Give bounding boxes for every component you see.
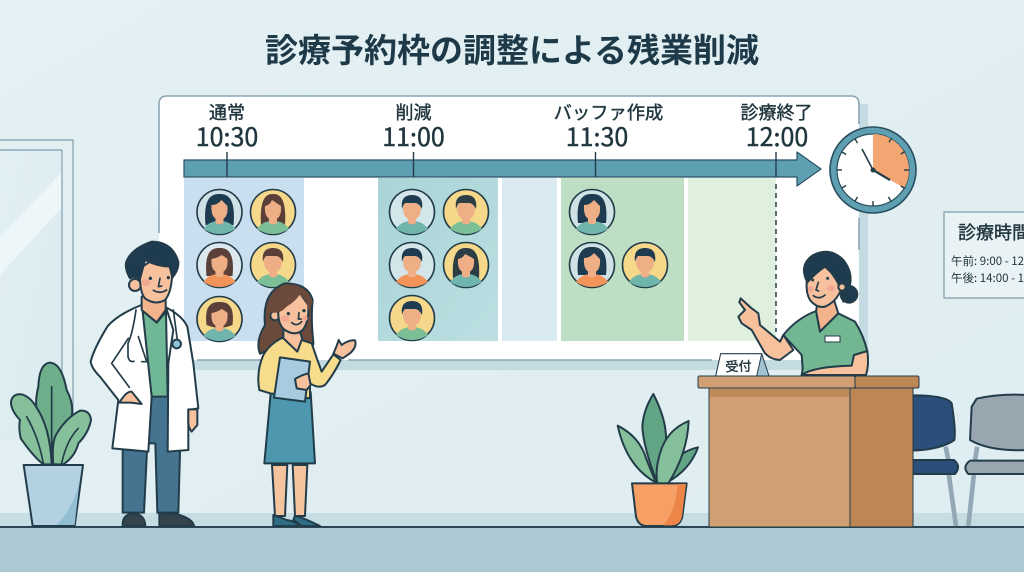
plant: right xyxy=(618,394,698,526)
title: 診療予約枠の調整による残業削減 xyxy=(265,24,759,72)
avatars: 11:30 column xyxy=(570,190,668,288)
column: reduced gap background xyxy=(502,178,557,341)
avatars: 10:30 column xyxy=(197,190,296,342)
chair: navy xyxy=(910,395,958,526)
panel: schedule board xyxy=(159,96,868,370)
icon: wall clock xyxy=(830,127,916,213)
assistant lower body xyxy=(264,392,320,526)
uniform xyxy=(783,311,867,376)
hair xyxy=(804,252,851,302)
label: reduced 11:00 xyxy=(382,99,445,154)
doctor head xyxy=(126,242,178,322)
hair bun xyxy=(841,286,857,303)
label: end 12:00 xyxy=(740,99,812,154)
person: assistant xyxy=(258,283,356,526)
sign: consultation hours xyxy=(944,212,1024,298)
chair: grey xyxy=(965,395,1024,526)
doctor body xyxy=(91,305,198,526)
desk top xyxy=(698,376,855,388)
label: buffer 11:30: 11:30 xyxy=(566,118,628,154)
avatars: 11:00 column xyxy=(390,190,488,340)
door frame xyxy=(0,140,73,440)
face xyxy=(807,265,842,307)
dashed end line xyxy=(775,184,777,332)
column: reduced slot background xyxy=(378,178,498,341)
timeline arrow xyxy=(184,152,821,186)
plant: left xyxy=(11,363,91,526)
ear xyxy=(838,283,846,291)
column: normal slot background xyxy=(184,178,304,341)
near arm xyxy=(802,351,868,375)
facial features xyxy=(808,277,835,298)
label: normal 10:30 xyxy=(196,99,258,154)
label: end 12:00: 診療終了 xyxy=(740,99,812,125)
label: reduced 11:00: 11:00 xyxy=(382,118,445,154)
label: reduced 11:00: 削減 xyxy=(396,99,432,125)
floor xyxy=(0,526,1024,572)
neck xyxy=(816,300,838,332)
skirting band xyxy=(0,513,1024,527)
column: buffer slot background xyxy=(561,178,684,341)
label: normal 10:30: 10:30 xyxy=(196,118,258,154)
reception desk xyxy=(698,376,919,527)
label: buffer 11:30 xyxy=(554,99,663,154)
person: doctor xyxy=(91,242,198,526)
coat folds xyxy=(112,338,129,387)
desk sign: reception: 受付 xyxy=(725,356,752,375)
pointing arm xyxy=(738,298,793,360)
assistant hair back xyxy=(258,283,313,354)
person: receptionist xyxy=(738,252,868,376)
name badge xyxy=(825,336,840,342)
hands xyxy=(119,392,197,432)
label: normal 10:30: 通常 xyxy=(209,99,245,125)
assistant upper body xyxy=(258,284,356,402)
scrub top xyxy=(142,310,168,397)
stethoscope xyxy=(128,310,177,362)
desk body front xyxy=(709,388,850,527)
trousers xyxy=(123,395,180,513)
column: buffer gap background xyxy=(688,178,776,341)
label: end 12:00: 12:00 xyxy=(746,118,808,154)
desk sign: reception xyxy=(716,354,769,376)
label: buffer 11:30: バッファ作成 xyxy=(554,99,663,125)
shoes xyxy=(123,514,194,526)
lab coat xyxy=(91,305,198,452)
desk body side xyxy=(850,388,913,527)
